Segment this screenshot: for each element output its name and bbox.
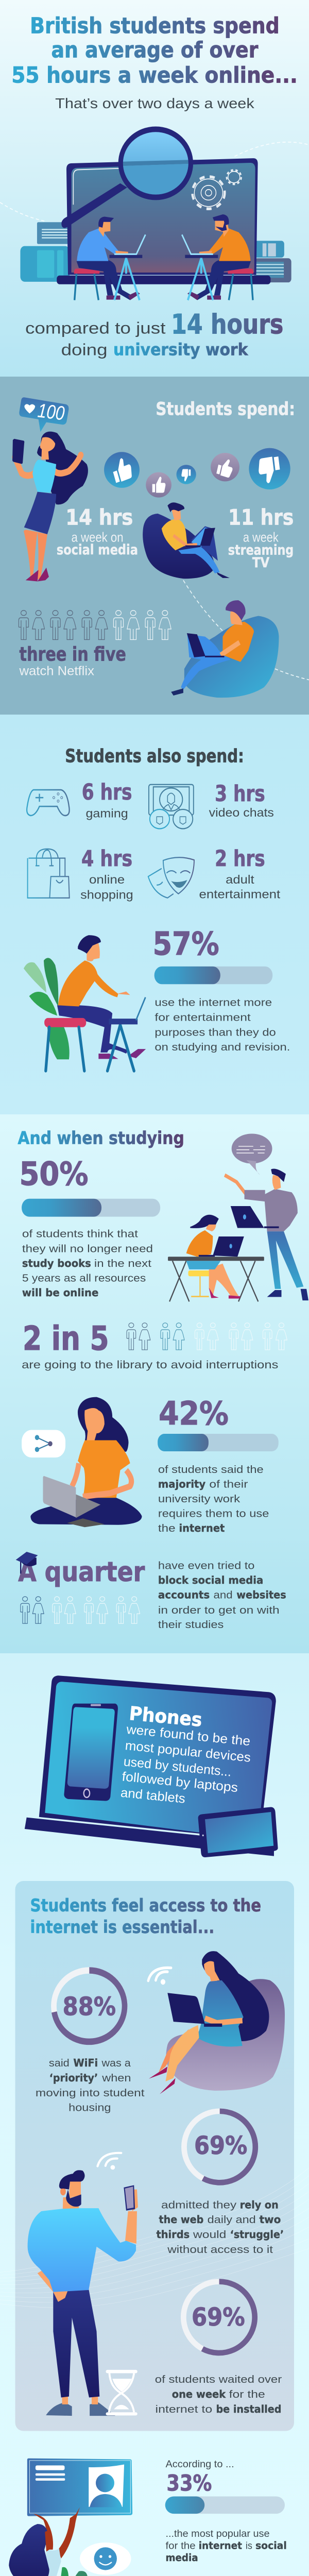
donut chart: 69 percent rely on web <box>184 2111 255 2182</box>
stat: three in five watch Netflix: watch Netflix <box>19 664 94 678</box>
illustration: books right <box>254 241 291 282</box>
text: compared to just 14 hours <box>25 308 283 340</box>
donut chart: 69 percent waited: 69% <box>192 2303 245 2332</box>
illustration: books left <box>20 222 70 282</box>
donut chart: 88 percent <box>54 1971 125 2042</box>
stat: 11 hrs streaming TV: 11 hrs <box>228 505 294 530</box>
text: rely on the web: rely on <box>240 2198 279 2211</box>
illustration: man at laptop with plant <box>24 935 146 1071</box>
text: a quarter description: websites <box>236 1588 286 1601</box>
text: compared to just 14 hours: 14 hours <box>171 308 283 340</box>
subtitle: That’s over two days a week <box>55 96 254 111</box>
illustration: standing man with laptop <box>225 1169 308 1300</box>
text: compared to just 14 hours: compared to just <box>25 319 165 337</box>
decorative dashed path <box>183 580 309 680</box>
icon: like counter badge <box>19 397 68 432</box>
stat: 11 hrs streaming TV: streaming <box>228 542 294 558</box>
text: 50 percent description <box>22 1228 153 1299</box>
stat: 3 hrs video chats: video chats <box>209 806 274 820</box>
text: most popular use: ...the most popular use <box>165 2529 270 2539</box>
text: a quarter description: in order to get on with <box>158 1605 280 1616</box>
text: a quarter description <box>158 1560 286 1631</box>
illustration: bearded man with phone <box>28 2170 138 2416</box>
decorative dashed curves <box>0 142 309 221</box>
stat: 4 hrs online shopping: 4 hrs <box>81 846 132 872</box>
heading: students feel access: internet is essential... <box>30 1918 214 1938</box>
progress bar: 42 percent <box>158 1434 279 1451</box>
illustration: man on blue beanbag <box>171 600 279 698</box>
text: 50 percent description: they will no longer need <box>22 1243 153 1255</box>
section background: students also spend <box>0 715 309 1114</box>
stat: 4 hrs online shopping: online <box>89 873 125 887</box>
illustration: seated woman at laptop <box>168 1215 264 1299</box>
icon: like counter badge: 100 <box>37 399 65 425</box>
text: WiFi priority: moving into student <box>36 2088 145 2099</box>
intro section <box>0 13 309 360</box>
stat: 2 hrs adult entertainment: 2 hrs <box>215 846 265 872</box>
text: 42 percent description: of students said the <box>158 1464 264 1476</box>
section background: students spend <box>0 377 309 715</box>
text: 50 percent description: of students think that <box>22 1228 139 1240</box>
text: a quarter description: have even tried to <box>158 1560 254 1572</box>
stat: 6 hrs gaming: 6 hrs <box>82 779 132 805</box>
illustration: desk <box>169 1261 258 1301</box>
pictogram: one in four people <box>21 1597 140 1623</box>
stat: 2 hrs adult entertainment: entertainment <box>199 887 280 901</box>
stat: 3 hrs video chats: 3 hrs <box>215 781 265 807</box>
section background: intro <box>0 0 309 377</box>
heading: students also spend: Students also spend: <box>65 745 244 767</box>
text: 42 percent description <box>158 1464 269 1535</box>
icon: share bubble <box>22 1430 65 1458</box>
illustration: man on dark beanbag <box>143 502 230 579</box>
when studying section <box>18 1128 308 1432</box>
stat: 4 hrs online shopping <box>80 846 133 902</box>
text: rely on the web: two <box>260 2213 281 2226</box>
heading: students feel access: Students feel access to the <box>30 1896 261 1916</box>
donut chart: 88 percent: 88% <box>63 1992 116 2021</box>
stat: 50 percent: 50% <box>20 1155 88 1193</box>
title: 55 hours a week online... <box>11 63 298 88</box>
text: phones most popular: followed by laptops <box>122 1769 238 1795</box>
illustration: big laptop <box>57 158 270 284</box>
stat: three in five watch Netflix <box>19 643 126 678</box>
stat: 11 hrs streaming TV: TV <box>252 554 270 570</box>
icon: wifi <box>148 1968 171 1984</box>
pictogram: three in five people <box>19 611 171 639</box>
text: waited one week: be installed <box>216 2403 281 2415</box>
text: 50 percent description: in the next <box>94 1258 152 1269</box>
heading: students feel access <box>30 1896 261 1938</box>
text: 42 percent description: the <box>158 1523 176 1535</box>
stat: 3 hrs video chats <box>209 781 274 820</box>
text: 50 percent description: 5 years as all resources <box>22 1273 146 1284</box>
progress bar: 57 percent <box>154 967 272 984</box>
progress bar: 50 percent <box>22 1199 160 1217</box>
icon: theatre masks <box>148 857 194 898</box>
icon: gears <box>193 170 241 209</box>
text: most popular use: for the <box>165 2540 196 2551</box>
text: most popular use: social <box>255 2539 287 2551</box>
text: doing university work: doing <box>61 342 108 359</box>
text: WiFi priority: when <box>101 2073 131 2084</box>
stat: 2 hrs adult entertainment <box>199 846 280 901</box>
stat: 2 in 5: 2 in 5 <box>23 1319 109 1358</box>
stat: 11 hrs streaming TV: a week <box>243 530 279 545</box>
icon: thumbs bubbles <box>104 448 290 498</box>
icon: game controller <box>27 790 70 816</box>
text: WiFi priority <box>36 2057 145 2114</box>
illustration: woman on purple beanbag <box>149 1951 285 2094</box>
icon: hourglass <box>106 2370 138 2415</box>
text: rely on the web: admitted they <box>161 2199 237 2211</box>
icon: smiley bubble <box>80 2543 131 2575</box>
stat: 42 percent: 42% <box>159 1395 229 1432</box>
text: WiFi priority: was a <box>101 2058 131 2069</box>
text: 57 percent description: on studying and revision. <box>154 1042 290 1054</box>
text: 50 percent description: study books <box>22 1257 91 1269</box>
icon: speech bubble <box>232 1133 272 1175</box>
text: according to: According to ... <box>165 2459 234 2470</box>
stat: 4 hrs online shopping: shopping <box>80 888 133 902</box>
text: phones most popular: most popular devices <box>125 1738 251 1765</box>
stat: 2 hrs adult entertainment: adult <box>226 873 254 887</box>
donut chart: 69 percent rely on web: 69% <box>194 2131 247 2160</box>
text: WiFi priority: housing <box>68 2102 111 2114</box>
text: library: are going to the library to avoid interruptions <box>22 1359 278 1371</box>
text: 42 percent description: requires them to use <box>158 1508 269 1520</box>
text: a quarter description: and <box>213 1589 233 1601</box>
title: British students spend <box>30 13 280 39</box>
text: 42 percent description: university work <box>158 1494 241 1505</box>
stat: 11 hrs streaming TV <box>228 505 294 570</box>
illustration: man with orange sweater <box>182 214 253 300</box>
text: 42 percent description: of their <box>209 1479 248 1490</box>
icon: phone <box>64 1704 118 1801</box>
text: a quarter description: block social media <box>158 1574 263 1586</box>
illustration: woman with phone <box>12 432 88 582</box>
icon: magnifying glass <box>61 129 191 228</box>
students also spend section <box>24 745 290 1071</box>
progress bar: 33 percent <box>165 2496 285 2514</box>
stat: 14 hrs social media: social media <box>57 541 138 557</box>
section background: phones and closing <box>0 1653 309 2576</box>
pictogram: two in five people <box>127 1323 287 1350</box>
text: phones most popular: used by students... <box>123 1754 232 1779</box>
illustration: profile card <box>27 2459 132 2516</box>
text: rely on the web <box>156 2198 284 2256</box>
decorative thin wave lines <box>0 2168 309 2308</box>
text: rely on the web: without access to it <box>167 2244 273 2256</box>
text: doing university work: university work <box>113 341 249 360</box>
text: phones most popular <box>120 1703 251 1806</box>
text: rely on the web: ‘struggle’ <box>230 2228 284 2241</box>
stat: 6 hrs gaming <box>82 779 132 820</box>
text: waited one week <box>155 2374 282 2415</box>
text: a quarter description: their studies <box>158 1619 224 1631</box>
illustration: man with blue sweater <box>74 217 145 300</box>
title <box>11 13 298 88</box>
illustration: laptop <box>25 1675 276 1856</box>
text: rely on the web: daily and <box>208 2214 256 2226</box>
stat: a quarter: A quarter <box>18 1556 145 1588</box>
text: waited one week: internet to <box>156 2403 212 2415</box>
illustration: plant <box>48 2567 88 2576</box>
text: 42 percent description: majority <box>158 1478 206 1490</box>
icon: video chat <box>149 785 194 828</box>
students spend section <box>12 397 309 698</box>
text: waited one week: of students waited over <box>155 2374 282 2385</box>
text: rely on the web: the web <box>159 2213 203 2226</box>
stat: 14 hrs social media: 14 hrs <box>65 505 133 530</box>
title: an average of over <box>52 38 259 63</box>
text: waited one week: one week <box>172 2388 226 2400</box>
icon: shopping bags <box>28 849 70 898</box>
text: rely on the web: thirds <box>156 2228 190 2241</box>
text: WiFi priority: ‘priority’ <box>49 2072 98 2084</box>
illustration: woman holding card <box>9 2507 80 2576</box>
text: WiFi priority: WiFi <box>73 2057 98 2069</box>
text: rely on the web: would <box>193 2229 226 2241</box>
text: 57 percent description: for entertainment <box>154 1012 251 1024</box>
stat: 57 percent: 57% <box>153 926 219 962</box>
text: 57 percent description: use the internet more <box>154 997 272 1009</box>
stat: three in five watch Netflix: three in five <box>20 643 126 666</box>
text: phones most popular: Phones <box>128 1703 203 1732</box>
text: 50 percent description: will be online <box>22 1286 98 1299</box>
illustration: woman with laptop cross-legged <box>30 1397 142 1527</box>
text: phones most popular: were found to be the <box>125 1722 251 1749</box>
stat: 33 percent: 33% <box>166 2471 212 2497</box>
text: a quarter description: accounts <box>158 1588 210 1601</box>
text: 57 percent description: purposes than they do <box>154 1027 276 1039</box>
text: most popular use: is <box>246 2540 252 2551</box>
stat: 14 hrs social media <box>57 505 138 557</box>
icon: graduation cap <box>16 1552 38 1573</box>
text: most popular use: internet <box>199 2539 242 2551</box>
icon: tablet <box>198 1807 278 1857</box>
icon: wifi <box>97 2153 121 2168</box>
text: doing university work <box>61 341 249 360</box>
text: 57 percent description <box>154 997 290 1054</box>
heading: and when studying: And when studying <box>18 1128 184 1148</box>
panel: internet essential card <box>15 1881 294 2431</box>
stat: 14 hrs social media: a week on <box>72 530 124 545</box>
text: phones most popular: and tablets <box>120 1785 186 1806</box>
donut chart: 69 percent waited <box>183 2281 255 2353</box>
text: 42 percent description: internet <box>179 1522 225 1535</box>
stat: 6 hrs gaming: gaming <box>85 806 128 820</box>
text: most popular use <box>165 2529 287 2564</box>
text: most popular use: media <box>165 2552 198 2564</box>
section background: when studying <box>0 1114 309 1653</box>
text: waited one week: for the <box>229 2388 265 2400</box>
text: WiFi priority: said <box>49 2058 70 2069</box>
heading: students spend: Students spend: <box>156 398 295 419</box>
